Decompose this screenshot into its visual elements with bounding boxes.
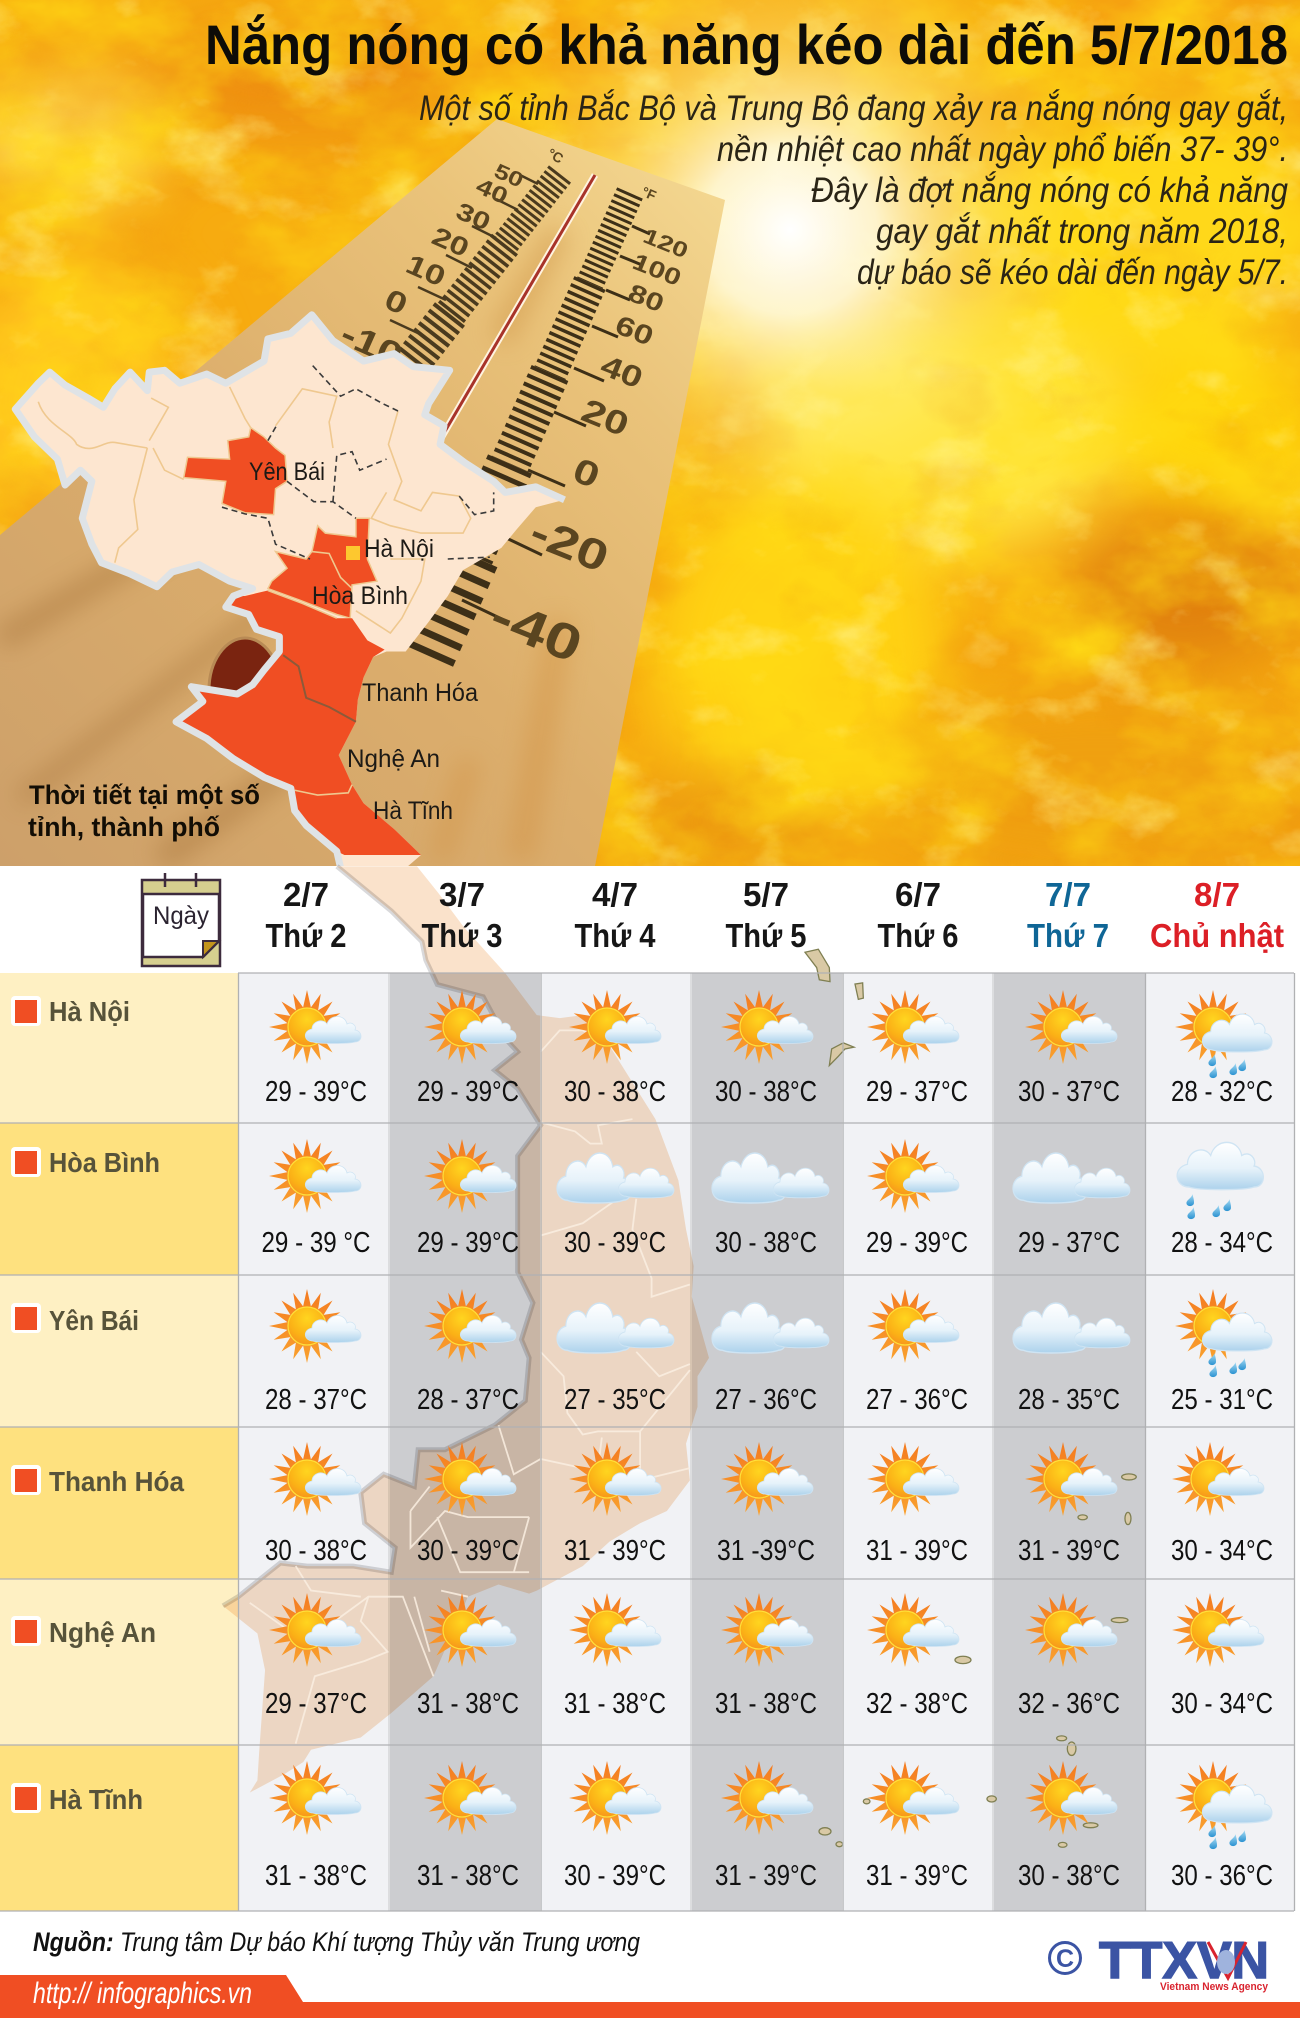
- cell: Hà Nội 7/7: [1018, 990, 1120, 1108]
- sun glare behind thermometer: [532, 0, 1068, 498]
- cell: Thanh Hóa 6/7: [866, 1442, 968, 1567]
- cell: Nghệ An 4/7: 31 - 38°C: [564, 1688, 666, 1720]
- cell: Hòa Bình 5/7: 30 - 38°C: [715, 1227, 817, 1259]
- header 6/7: Thứ 6: [878, 917, 958, 954]
- cell: Hòa Bình 3/7: [417, 1139, 519, 1259]
- cell: Nghệ An 3/7: [417, 1593, 519, 1720]
- map caption: Thời tiết tại một số: [29, 780, 260, 810]
- cell: Hà Nội 3/7: [417, 990, 519, 1108]
- logo: TTXVN: Vietnam News Agency: [1160, 1981, 1269, 1993]
- Fahrenheit scale labels: 40: [596, 349, 647, 395]
- cell: Yên Bái 8/7: 25 - 31°C: [1171, 1384, 1273, 1416]
- Celsius scale labels: -10: [335, 314, 408, 375]
- cell: Nghệ An 2/7: 29 - 37°C: [265, 1688, 367, 1720]
- row label: Hòa Bình: Hòa Bình: [49, 1147, 160, 1178]
- cell: Hà Nội 3/7: 29 - 39°C: [417, 1076, 519, 1108]
- cell: Yên Bái 5/7: 27 - 36°C: [715, 1384, 817, 1416]
- cell: Hà Tĩnh 6/7: 31 - 39°C: [866, 1860, 968, 1892]
- column headers: [266, 876, 1284, 954]
- header 5/7: [726, 876, 806, 954]
- western border line: [223, 866, 541, 1606]
- header 7/7: [1027, 876, 1109, 954]
- header 3/7: [422, 876, 502, 954]
- cell: Thanh Hóa 7/7: [1018, 1442, 1120, 1567]
- cell: Hòa Bình 6/7: [866, 1139, 968, 1259]
- header 7/7: Thứ 7: [1027, 917, 1109, 954]
- table grid lines: [0, 973, 1294, 1911]
- cell: Thanh Hóa 7/7: 31 - 39°C: [1018, 1535, 1120, 1567]
- header 3/7: 3/7: [439, 876, 485, 913]
- cell: Hà Nội 6/7: [866, 990, 968, 1108]
- cell: Thanh Hóa 8/7: 30 - 34°C: [1171, 1535, 1273, 1567]
- cell: Nghệ An 5/7: [715, 1593, 817, 1720]
- logo: TTXVN: TTXVN: [1099, 1932, 1269, 1990]
- cell: Nghệ An 8/7: [1171, 1593, 1273, 1720]
- header 5/7: 5/7: [743, 876, 789, 913]
- panel: forecast table backgrounds: [0, 866, 1300, 2018]
- cell: Nghệ An 5/7: 31 - 38°C: [715, 1688, 817, 1720]
- Fahrenheit scale labels: [493, 187, 687, 659]
- cell: Nghệ An 2/7: [265, 1593, 367, 1720]
- cell: Thanh Hóa 5/7: 31 -39°C: [717, 1535, 815, 1567]
- map caption: tỉnh, thành phố: [28, 812, 220, 842]
- cell: Yên Bái 7/7: 28 - 35°C: [1018, 1384, 1120, 1416]
- header 4/7: 4/7: [592, 876, 638, 913]
- label: Hòa Bình: Hòa Bình: [312, 582, 408, 610]
- cell: Yên Bái 6/7: [866, 1289, 968, 1416]
- cell: Hà Tĩnh 5/7: [715, 1761, 817, 1892]
- cell: Yên Bái 2/7: 28 - 37°C: [265, 1384, 367, 1416]
- cell: Thanh Hóa 5/7: [717, 1442, 815, 1567]
- day columns: [239, 973, 1294, 1911]
- label: Nghệ An: Nghệ An: [347, 745, 440, 773]
- Celsius scale labels: 0: [380, 283, 412, 322]
- cell: Hà Tĩnh 3/7: 31 - 38°C: [417, 1860, 519, 1892]
- cell: Hà Tĩnh 4/7: 30 - 39°C: [564, 1860, 666, 1892]
- cell: Yên Bái 8/7: [1171, 1289, 1273, 1416]
- cell: Thanh Hóa 4/7: [564, 1442, 666, 1567]
- cell: Nghệ An 7/7: [1018, 1593, 1120, 1720]
- label: Hà Nội: Hà Nội: [364, 535, 434, 563]
- cell: Nghệ An 6/7: 32 - 38°C: [866, 1688, 968, 1720]
- Fahrenheit scale labels: 0: [567, 450, 605, 496]
- cell: Nghệ An 6/7: [866, 1593, 968, 1720]
- cell: Hà Tĩnh 8/7: 30 - 36°C: [1171, 1860, 1273, 1892]
- cell: Hòa Bình 8/7: [1171, 1142, 1273, 1259]
- map: northern Vietnam with highlighted provinces: [15, 315, 564, 885]
- row label: Hà Tĩnh: [11, 1783, 143, 1815]
- header 8/7: 8/7: [1194, 876, 1240, 913]
- province borders: [38, 387, 471, 795]
- cell: Hà Tĩnh 2/7: [265, 1761, 367, 1892]
- label: Yên Bái: Yên Bái: [249, 458, 325, 486]
- row forecast: Yên Bái: [265, 1289, 1273, 1416]
- Celsius scale labels: 50: [490, 160, 527, 193]
- cell: Hà Nội 2/7: 29 - 39°C: [265, 1076, 367, 1108]
- row forecast: Hà Tĩnh: [265, 1761, 1273, 1892]
- cell: Yên Bái 6/7: 27 - 36°C: [866, 1384, 968, 1416]
- cell: Hà Nội 4/7: 30 - 38°C: [564, 1076, 666, 1108]
- header 8/7: Chủ nhật: [1150, 917, 1284, 954]
- row forecast: Nghệ An: [265, 1593, 1273, 1720]
- row labels: [11, 996, 184, 1815]
- Celsius scale labels: 10: [401, 248, 450, 293]
- southern province borders: [250, 1030, 690, 1744]
- cell: Yên Bái 3/7: 28 - 37°C: [417, 1384, 519, 1416]
- cell: Hà Nội 5/7: 30 - 38°C: [715, 1076, 817, 1108]
- map outline: [15, 315, 564, 885]
- cell: Yên Bái 4/7: [557, 1303, 674, 1416]
- header 8/7: [1150, 876, 1284, 954]
- cell: Yên Bái 2/7: [265, 1289, 367, 1416]
- islands: Hoàng Sa and Trường Sa: [805, 949, 1136, 1847]
- cell: Hà Nội 5/7: [715, 990, 817, 1108]
- cell: Hòa Bình 2/7: 29 - 39 °C: [262, 1227, 370, 1259]
- cell: Nghệ An 8/7: 30 - 34°C: [1171, 1688, 1273, 1720]
- source note: Nguồn: Trung tâm Dự báo Khí tượng Thủy văn Trung ương: [33, 1927, 640, 1957]
- Fahrenheit scale labels: 120: [640, 224, 691, 263]
- Fahrenheit scale ticks: [425, 193, 650, 656]
- Celsius scale ticks: [390, 174, 560, 378]
- header 6/7: 6/7: [895, 876, 941, 913]
- header 7/7: 7/7: [1045, 876, 1091, 913]
- cell: Hòa Bình 8/7: 28 - 34°C: [1171, 1227, 1273, 1259]
- header 2/7: [266, 876, 346, 954]
- cell: Hòa Bình 3/7: 29 - 39°C: [417, 1227, 519, 1259]
- header 4/7: Thứ 4: [574, 917, 656, 954]
- cell: Thanh Hóa 8/7: [1171, 1442, 1273, 1567]
- cell: Hà Tĩnh 2/7: 31 - 38°C: [265, 1860, 367, 1892]
- cell: Hòa Bình 2/7: [262, 1139, 370, 1259]
- Celsius scale labels: 40: [472, 174, 511, 209]
- cell: Hà Nội 2/7: [265, 990, 367, 1108]
- cell: Hòa Bình 4/7: 30 - 39°C: [564, 1227, 666, 1259]
- row label: Hà Tĩnh: Hà Tĩnh: [49, 1784, 143, 1815]
- cell: Hà Nội 8/7: [1171, 990, 1273, 1108]
- cell: Thanh Hóa 3/7: [417, 1442, 519, 1567]
- cell: Hà Tĩnh 3/7: [417, 1761, 519, 1892]
- cell: Nghệ An 3/7: 31 - 38°C: [417, 1688, 519, 1720]
- cell: Thanh Hóa 2/7: 30 - 38°C: [265, 1535, 367, 1567]
- thermometer bulb: [208, 636, 272, 690]
- Fahrenheit scale labels: 100: [629, 248, 685, 291]
- cell: Hà Nội 8/7: 28 - 32°C: [1171, 1076, 1273, 1108]
- label: Hà Tĩnh: Hà Tĩnh: [373, 797, 453, 825]
- cell: Hà Tĩnh 8/7: [1171, 1761, 1273, 1892]
- cell: Hà Nội 6/7: 29 - 37°C: [866, 1076, 968, 1108]
- panel: hero sky and thermometer: [0, 0, 1300, 900]
- cell: Yên Bái 7/7: [1013, 1303, 1130, 1416]
- cell: Thanh Hóa 4/7: 31 - 39°C: [564, 1535, 666, 1567]
- background: blazing sky: [0, 0, 1300, 900]
- cell: Hà Tĩnh 4/7: [564, 1761, 666, 1892]
- header 6/7: [878, 876, 958, 954]
- cell: Hòa Bình 6/7: 29 - 39°C: [866, 1227, 968, 1259]
- cell: Hòa Bình 5/7: [712, 1153, 829, 1259]
- cell: Thanh Hóa 6/7: 31 - 39°C: [866, 1535, 968, 1567]
- row label: Hà Nội: Hà Nội: [49, 996, 130, 1027]
- Celsius scale labels: °C: [545, 145, 566, 167]
- website address: http:// infographics.vn: [33, 1977, 252, 2010]
- cell: Hòa Bình 4/7: [557, 1153, 674, 1259]
- provinces: Thanh Hóa, Nghệ An, Hà Tĩnh: [176, 590, 421, 855]
- header 2/7: 2/7: [283, 876, 329, 913]
- cell: Hà Tĩnh 7/7: 30 - 38°C: [1018, 1860, 1120, 1892]
- provinces: Hà Nội and Hòa Bình: [268, 518, 377, 618]
- header 3/7: Thứ 3: [422, 917, 502, 954]
- marker: Hà Nội capital: [346, 546, 360, 560]
- row label: Hòa Bình: [11, 1147, 160, 1178]
- map: southern Vietnam watermark: [223, 866, 709, 1793]
- map caption: [28, 780, 260, 842]
- intro text: [419, 89, 1288, 292]
- icon: calendar "Ngày": Ngày: [153, 902, 209, 930]
- map base land: [15, 315, 564, 885]
- cell: Hòa Bình 7/7: [1013, 1153, 1130, 1259]
- header 4/7: [574, 876, 656, 954]
- icon: calendar "Ngày": [142, 873, 220, 966]
- header 5/7: Thứ 5: [726, 917, 806, 954]
- row label: Hà Nội: [11, 996, 130, 1027]
- cell: Hà Nội 4/7: [564, 990, 666, 1108]
- cell: Yên Bái 4/7: 27 - 35°C: [564, 1384, 666, 1416]
- mercury tube: [444, 173, 598, 439]
- row forecast: Hà Nội: [265, 990, 1273, 1108]
- row label: Nghệ An: Nghệ An: [49, 1617, 156, 1648]
- cell: Nghệ An 7/7: 32 - 36°C: [1018, 1688, 1120, 1720]
- Celsius scale labels: 30: [452, 197, 495, 236]
- cell: Nghệ An 4/7: [564, 1593, 666, 1720]
- province: Yên Bái: [184, 428, 287, 515]
- cell: Yên Bái 3/7: [417, 1289, 519, 1416]
- Fahrenheit scale labels: 60: [611, 309, 658, 352]
- label: Thanh Hóa: Thanh Hóa: [362, 679, 478, 707]
- cell: Thanh Hóa 2/7: [265, 1442, 367, 1567]
- cell: Hà Tĩnh 5/7: 31 - 39°C: [715, 1860, 817, 1892]
- Fahrenheit scale labels: °F: [639, 183, 659, 204]
- Fahrenheit scale labels: 20: [576, 392, 634, 444]
- thermometer wood panel: [0, 119, 725, 866]
- cell: Hòa Bình 7/7: 29 - 37°C: [1018, 1227, 1120, 1259]
- cell: Hà Tĩnh 6/7: [866, 1761, 968, 1892]
- footer band: [0, 1975, 1300, 2018]
- row label: Thanh Hóa: Thanh Hóa: [49, 1466, 184, 1497]
- row forecast: Hòa Bình: [262, 1139, 1273, 1259]
- cell: Yên Bái 5/7: [712, 1303, 829, 1416]
- row label: Yên Bái: Yên Bái: [49, 1305, 139, 1336]
- cell: Hà Nội 7/7: 30 - 37°C: [1018, 1076, 1120, 1108]
- Fahrenheit scale labels: -40: [483, 587, 590, 674]
- Celsius scale labels: 20: [428, 222, 473, 263]
- Fahrenheit scale labels: -20: [523, 507, 616, 582]
- logo: TTXVN: C: [1056, 1945, 1074, 1973]
- cell: Hà Tĩnh 7/7: [1018, 1761, 1120, 1892]
- row label backgrounds: [0, 973, 238, 1911]
- row forecast: Thanh Hóa: [265, 1442, 1273, 1567]
- row label: Nghệ An: [11, 1616, 156, 1648]
- Fahrenheit scale labels: 80: [624, 279, 668, 318]
- row label: Yên Bái: [11, 1303, 139, 1336]
- header 2/7: Thứ 2: [266, 917, 346, 954]
- cell: Thanh Hóa 3/7: 30 - 39°C: [417, 1535, 519, 1567]
- Celsius scale labels: [342, 148, 563, 356]
